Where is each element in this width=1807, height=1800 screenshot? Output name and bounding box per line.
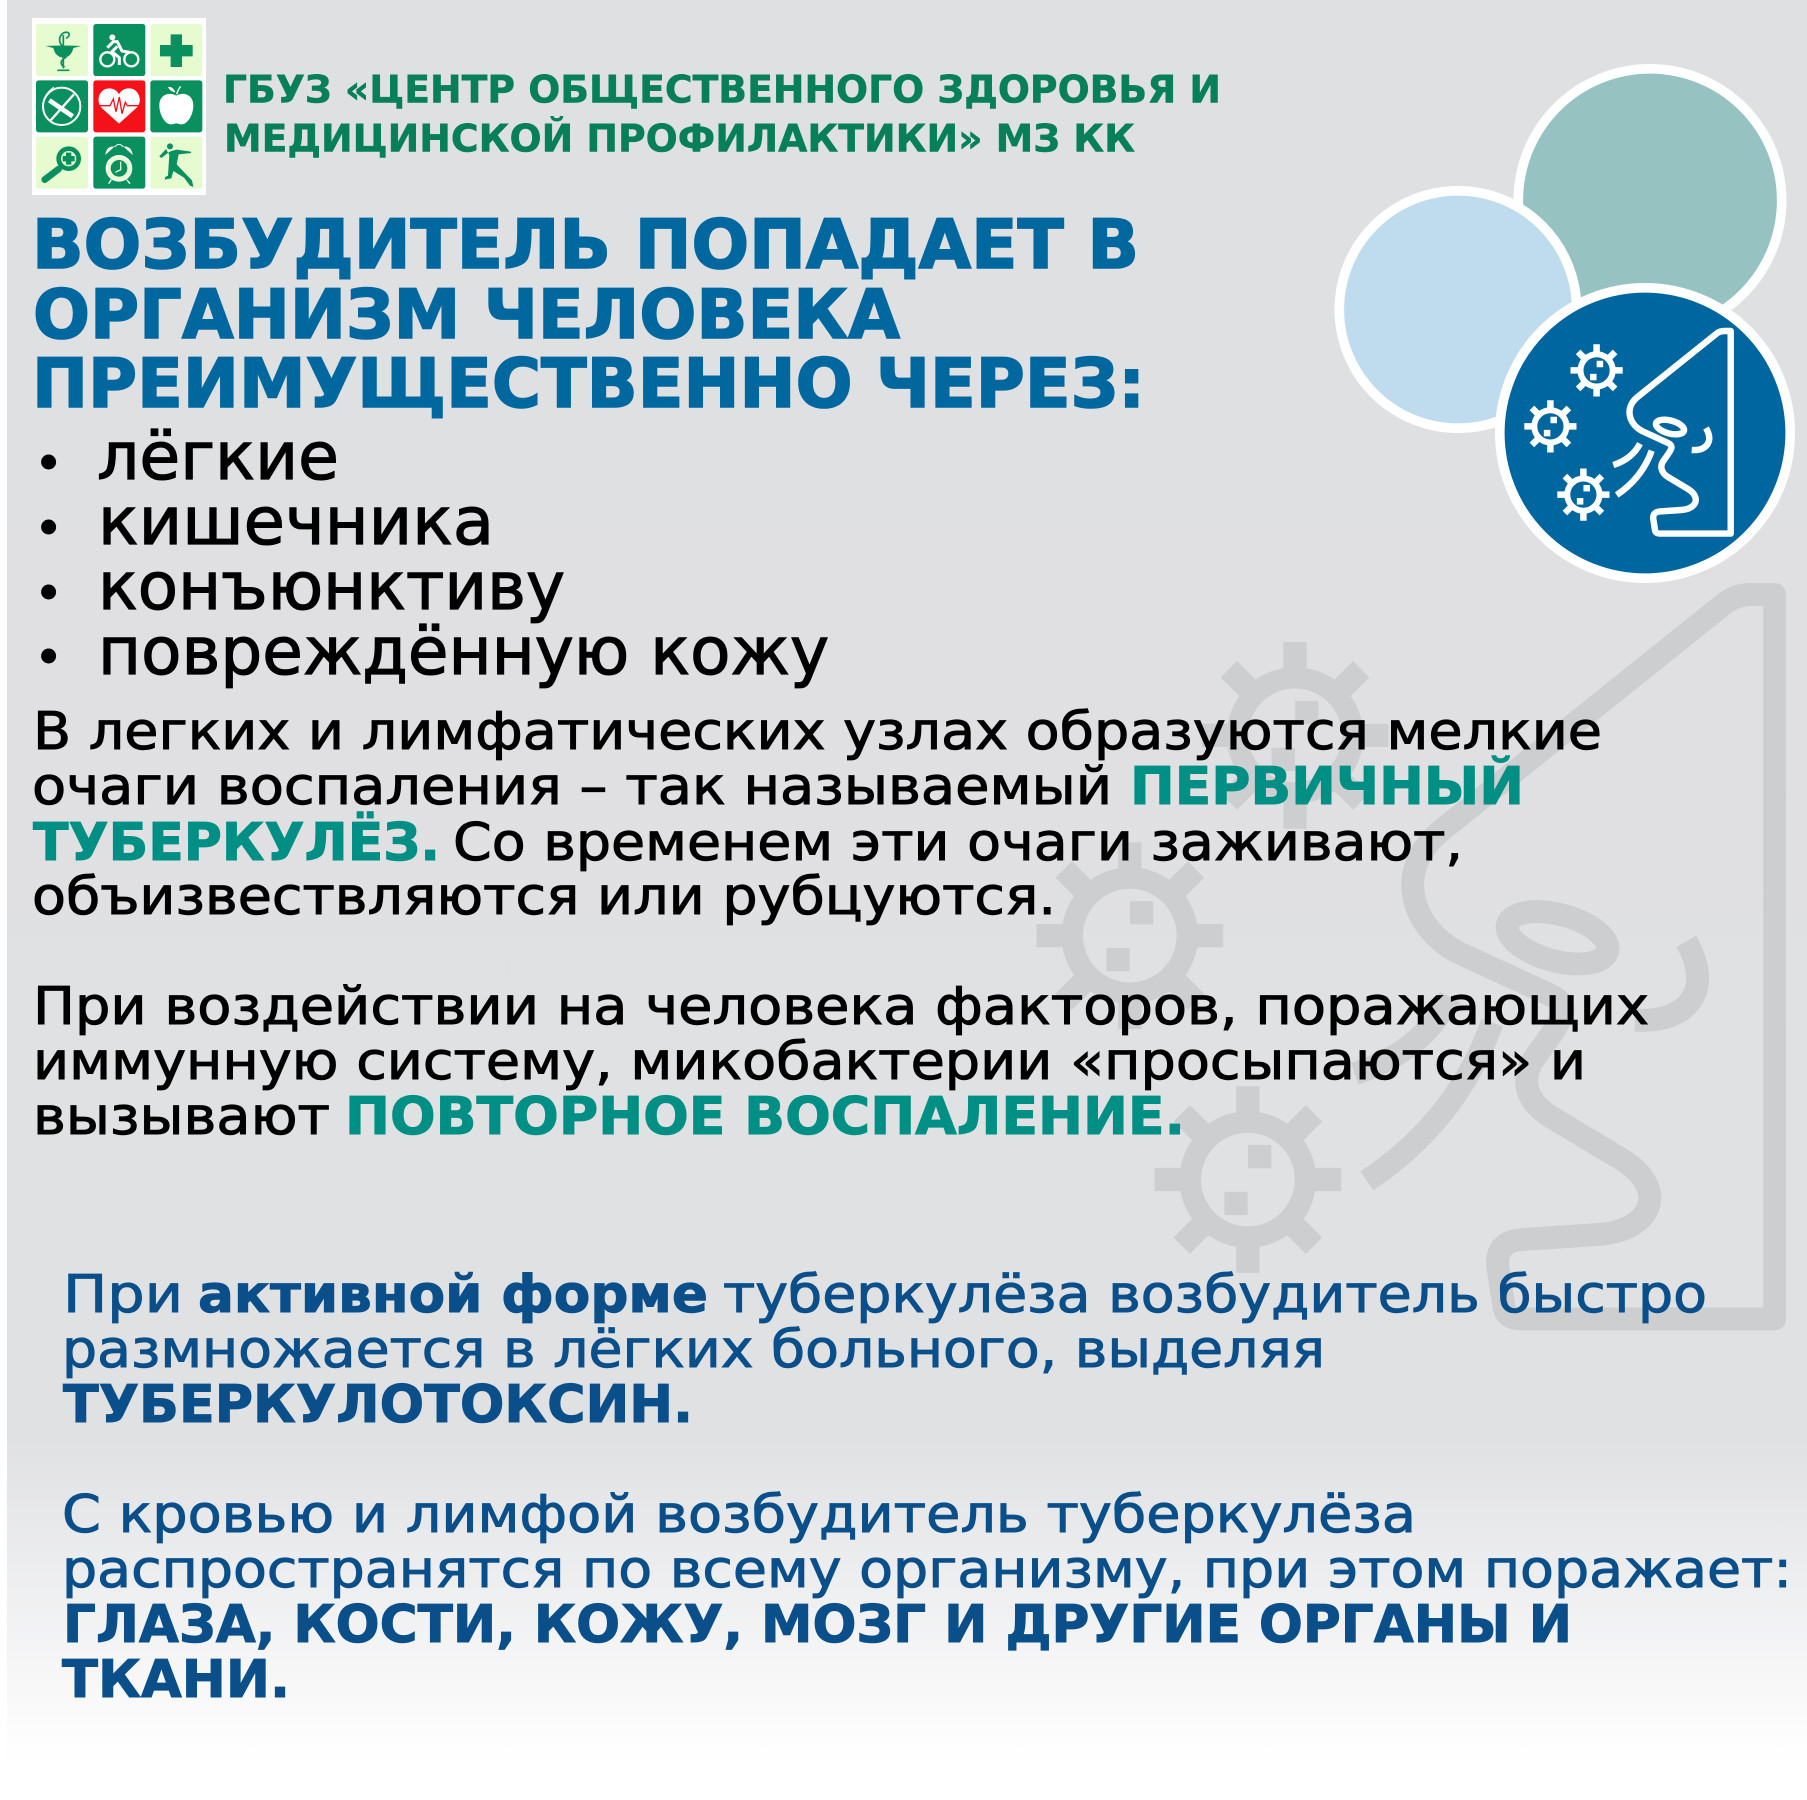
bullet list: entry routes: кишечника [98,483,494,560]
watermark: nose and germs icon [1037,594,1775,1319]
icon: magnifier [36,137,88,189]
icon: cyclist [93,24,145,76]
text block: repeat inflammation [33,977,1649,1147]
icon: no smoking [36,80,88,132]
title: ПРЕИМУЩЕСТВЕННО ЧЕРЕЗ: [32,345,1145,424]
text block: primary tuberculosis: Со временем эти очаги заживают, [453,813,1463,873]
text block: active form: При [63,1265,183,1325]
bullet list: entry routes: повреждённую кожу [98,613,829,690]
bullet list: entry routes: лёгкие [97,418,339,495]
title [32,206,1145,424]
text block: repeat inflammation: При воздействии на человека факторов, поражающих [33,977,1649,1037]
text block: spread through the body [62,1485,1792,1710]
text block: spread through the body: распространятся по всему организму, при этом поражает: [62,1540,1792,1600]
text block: repeat inflammation: ПОВТОРНОЕ ВОСПАЛЕНИЕ. [345,1087,1185,1147]
icon: alarm clock [93,137,145,189]
text block: primary tuberculosis: ТУБЕРКУЛЁЗ. [33,811,440,873]
text block: active form: ТУБЕРКУЛОТОКСИН. [63,1375,693,1435]
text block: active form: размножается в лёгких больного, выделяя [62,1320,1325,1380]
icon: medical bowl [36,24,88,76]
icon: nose inhaling germs [1524,331,1731,534]
text block: repeat inflammation: вызывают [33,1087,330,1147]
icon group: three circles with nose [1339,69,1790,578]
title: ОРГАНИЗМ ЧЕЛОВЕКА [33,276,900,355]
text block: repeat inflammation: иммунную систему, микобактерии «просыпаются» и [33,1032,1586,1092]
text block: active form [62,1265,1707,1435]
title: ВОЗБУДИТЕЛЬ ПОПАДАЕТ В [32,206,1139,285]
text block: primary tuberculosis: ПЕРВИЧНЫЙ [1130,755,1524,817]
icon: plus [150,24,202,76]
icon: runner [150,137,202,189]
icon: apple [150,80,202,132]
logo [32,18,206,195]
text block: primary tuberculosis: объизвествляются или рубцуются. [32,867,1056,927]
organisation name: ГБУЗ «ЦЕНТР ОБЩЕСТВЕННОГО ЗДОРОВЬЯ И [223,68,1221,112]
icon: heart with pulse [93,80,145,132]
bullet list: entry routes: конъюнктиву [98,548,565,625]
organisation name [223,68,1221,160]
text block: active form: туберкулёза возбудитель быстро [723,1265,1707,1325]
text block: primary tuberculosis [32,702,1602,927]
text block: primary tuberculosis: очаги воспаления – так называемый [32,757,1112,817]
text block: active form: активной форме [198,1265,708,1325]
organisation name: МЕДИЦИНСКОЙ ПРОФИЛАКТИКИ» МЗ КК [224,116,1135,160]
text block: spread through the body: ТКАНИ. [62,1650,290,1710]
bullet list: entry routes [41,418,829,690]
text block: spread through the body: С кровью и лимфой возбудитель туберкулёза [62,1485,1416,1545]
text block: primary tuberculosis: В легких и лимфатических узлах образуются мелкие [33,702,1602,762]
text block: spread through the body: ГЛАЗА, КОСТИ, КОЖУ, МОЗГ И ДРУГИЕ ОРГАНЫ И [63,1595,1572,1655]
